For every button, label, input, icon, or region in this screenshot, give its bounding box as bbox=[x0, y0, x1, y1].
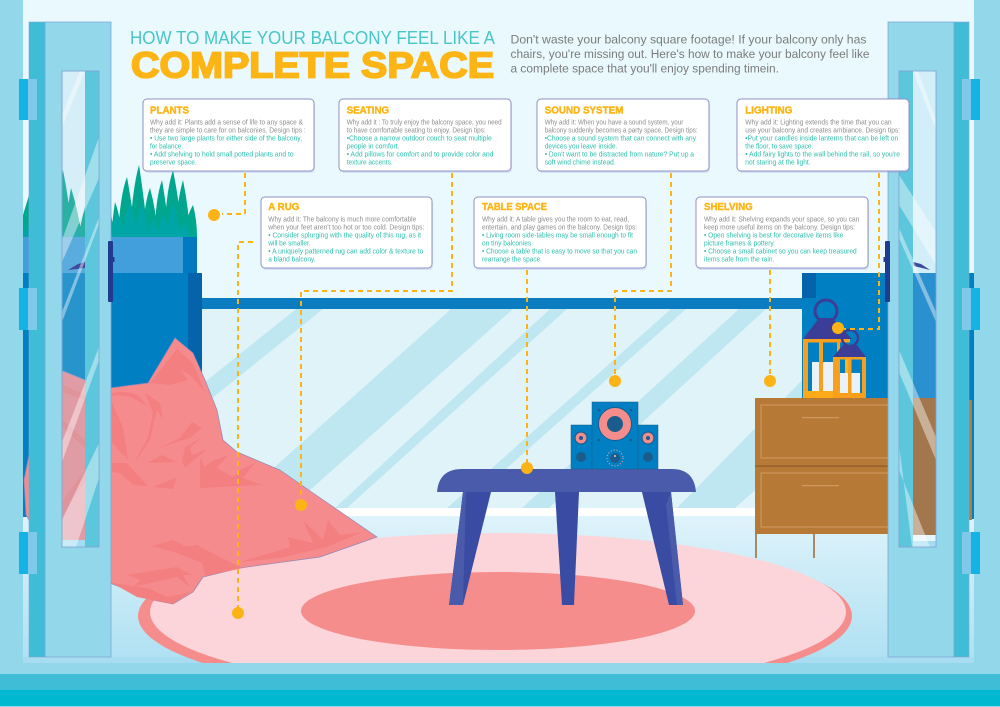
panel: table space: Why add it: A table gives you the room to eat, read, bbox=[482, 216, 629, 223]
left wall block and post bbox=[23, 273, 202, 517]
left wall bbox=[0, 0, 23, 707]
panel: a rug bbox=[261, 197, 433, 270]
connector: table space bbox=[521, 270, 533, 474]
panel: seating: Why add it : To truly enjoy the balcony space, you need bbox=[347, 119, 502, 126]
intro text: a complete space that you'll enjoy spending timein. bbox=[510, 62, 779, 76]
title: HOW TO MAKE YOUR BALCONY FEEL LIKE A bbox=[130, 28, 495, 48]
panel: seating bbox=[339, 99, 512, 173]
panel: sound system: devices you leave inside. bbox=[545, 143, 617, 150]
panel: lighting: LIGHTING bbox=[745, 104, 792, 116]
left door handle bbox=[108, 241, 114, 302]
panel: lighting: •Put your candles inside lanterns that can be left on bbox=[745, 135, 898, 142]
panel: sound system: •Choose a sound system that can connect with any bbox=[545, 135, 696, 142]
panel: a rug: • Consider splurging with the quality of this rug, as it bbox=[268, 232, 421, 239]
connector: seating bbox=[295, 173, 452, 511]
glass railing bbox=[202, 309, 802, 516]
panel: lighting: the floor, to save space. bbox=[745, 143, 813, 150]
left door hinges bbox=[19, 79, 37, 574]
panel: lighting bbox=[737, 99, 910, 173]
right door handle bbox=[884, 241, 890, 302]
intro text bbox=[510, 32, 870, 76]
panel: plants: preserve space. bbox=[150, 159, 197, 166]
intro text: Don't waste your balcony square footage! If your balcony only has bbox=[510, 32, 866, 46]
table top bbox=[437, 469, 696, 492]
balcony floor bbox=[23, 516, 974, 663]
panel: shelving: picture frames & pottery. bbox=[704, 240, 775, 247]
panel: shelving: • Choose a small cabinet so you can keep treasured bbox=[704, 248, 857, 255]
table bbox=[437, 469, 696, 605]
panel: seating: to have comfortable seating to enjoy. Design tips: bbox=[347, 127, 486, 134]
panel: sound system bbox=[537, 99, 710, 173]
panel: a rug: will be smaller. bbox=[267, 240, 311, 247]
floor strip beside doors bbox=[23, 657, 974, 663]
panel: sound system: Why add it: When you have a sound system, your bbox=[545, 119, 684, 126]
panel: sound system: SOUND SYSTEM bbox=[545, 104, 624, 116]
panel: seating: SEATING bbox=[347, 104, 389, 116]
panel: table space: on tiny balconies. bbox=[482, 240, 533, 247]
connector: a rug bbox=[232, 242, 253, 619]
connector: plants bbox=[208, 173, 245, 221]
large lantern bbox=[803, 300, 852, 398]
panel: plants: Why add it: Plants add a sense of life to any space & bbox=[150, 119, 303, 126]
panel: plants: for balance. bbox=[150, 143, 183, 150]
panel: table space: TABLE SPACE bbox=[482, 201, 547, 213]
table legs bbox=[449, 492, 683, 605]
cabinet bbox=[755, 398, 889, 558]
panel: a rug: A RUG bbox=[268, 201, 299, 213]
panel: sound system: soft wind chime instead. bbox=[545, 159, 616, 166]
panel: table space: rearrange the space. bbox=[482, 256, 542, 263]
panel: plants: PLANTS bbox=[150, 104, 189, 116]
rug centre bbox=[301, 572, 695, 650]
left plant bbox=[23, 165, 197, 237]
panel: plants: • Add shelving to hold small potted plants and to bbox=[150, 151, 294, 158]
panel: seating: • Add pillows for comfort and to provide color and bbox=[347, 151, 493, 158]
right door bbox=[888, 22, 969, 657]
panel: table space: • Living room side-tables may be small enough to fit bbox=[482, 232, 633, 239]
floor pillow bbox=[24, 338, 377, 604]
panel: lighting: • Add fairy lights to the wall behind the rail, so you're bbox=[745, 151, 900, 158]
panel: sound system: • Don't want to be distracted from nature? Put up a bbox=[545, 151, 694, 158]
balcony rail bbox=[202, 298, 802, 309]
reflection of handle bbox=[68, 262, 85, 270]
title bbox=[130, 28, 495, 86]
panel: shelving bbox=[696, 197, 869, 270]
bottom bands bbox=[0, 663, 1000, 707]
rug bbox=[138, 533, 852, 663]
connector: shelving bbox=[764, 270, 776, 387]
panel: plants bbox=[143, 99, 315, 173]
panel: lighting: use your balcony and creates ambiance. Design tips: bbox=[745, 127, 900, 134]
panel: seating: •Choose a narrow outdoor couch to seat multiple bbox=[347, 135, 492, 142]
panel: a rug: Why add it: The balcony is much more comfortable bbox=[268, 216, 416, 223]
small lantern bbox=[833, 330, 866, 398]
panel: seating: texture accents. bbox=[347, 159, 393, 166]
intro text: chairs, you're missing out. Here's how to make your balcony feel like bbox=[510, 47, 870, 61]
panel: lighting: Why add it: Lighting extends the time that you can bbox=[745, 119, 892, 126]
panel: shelving: SHELVING bbox=[704, 201, 753, 213]
reflection of handle bbox=[913, 262, 930, 270]
connector: lighting bbox=[832, 173, 879, 334]
panel: shelving: Why add it: Shelving expands your space, so you can bbox=[704, 216, 859, 223]
right door hinges bbox=[962, 79, 980, 574]
panel: sound system: balcony suddenly becomes a party space. Design tips: bbox=[545, 127, 698, 134]
right wall block bbox=[802, 273, 974, 520]
panel: seating: people in comfort. bbox=[347, 143, 399, 150]
panel: a rug: a bland balcony. bbox=[268, 256, 316, 263]
sound system bbox=[571, 402, 658, 469]
panel: lighting: not staring at the light. bbox=[745, 159, 811, 166]
panel: a rug: when your feet aren't too hot or too cold. Design tips: bbox=[267, 224, 424, 231]
panel: table space bbox=[474, 197, 647, 270]
panel: plants: they are simple to care for on balconies. Design tips : bbox=[150, 127, 306, 134]
panel: plants: • Use two large plants for either side of the balcony, bbox=[150, 135, 302, 142]
panel: a rug: • A uniquely patterned rug can add color & texture to bbox=[268, 248, 423, 255]
connector: sound system bbox=[609, 173, 671, 387]
panel: shelving: • Open shelving is best for decorative items like bbox=[704, 232, 843, 239]
left door bbox=[29, 22, 111, 657]
left planter bbox=[23, 237, 197, 273]
right wall bbox=[974, 0, 1000, 707]
panel: shelving: keep more useful items on the balcony. Design tips: bbox=[704, 224, 855, 231]
panel: table space: entertain, and play games on the balcony. Design tips: bbox=[482, 224, 637, 231]
panel: shelving: items safe from the rain. bbox=[704, 256, 774, 263]
title: COMPLETE SPACE bbox=[131, 44, 494, 86]
panel: table space: • Choose a table that is easy to move so that you can bbox=[482, 248, 637, 255]
